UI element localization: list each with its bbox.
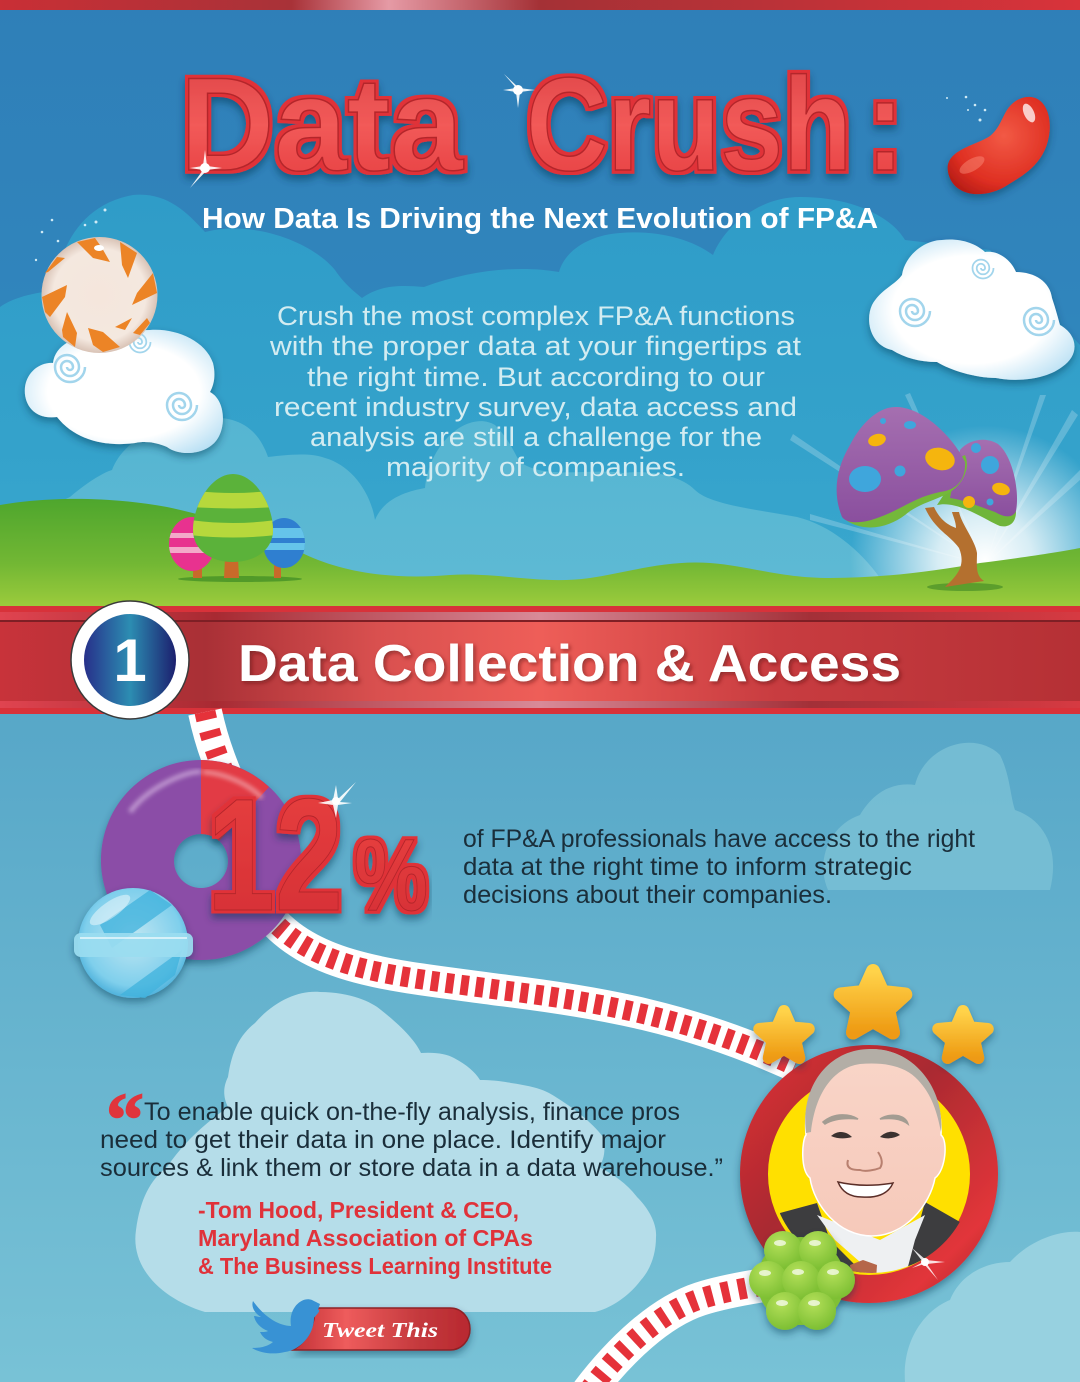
quote attribution: -Tom Hood, President & CEO, bbox=[198, 1197, 519, 1223]
candy stripe road: lower bbox=[588, 1280, 800, 1382]
icon: twitter bird bbox=[252, 1299, 320, 1353]
section heading: Data Collection & Access bbox=[238, 635, 901, 693]
icon: gold stars bbox=[759, 971, 988, 1058]
background clouds: lower section bbox=[135, 743, 1080, 1382]
background: sky bbox=[0, 0, 1080, 610]
quote attribution: & The Business Learning Institute bbox=[198, 1253, 552, 1279]
sparkle on 12 bbox=[318, 782, 356, 818]
left white cloud bbox=[25, 330, 223, 453]
stat description bbox=[463, 825, 975, 909]
intro paragraph bbox=[269, 301, 802, 482]
quote text: To enable quick on-the-fly analysis, finance pros bbox=[144, 1098, 680, 1126]
portrait: suit and shirt bbox=[780, 1202, 960, 1273]
subtitle: How Data Is Driving the Next Evolution of FP&A bbox=[202, 203, 878, 235]
top ribbon bbox=[0, 0, 1080, 10]
quote text: need to get their data in one place. Identify major bbox=[100, 1126, 666, 1154]
stat description: of FP&A professionals have access to the right bbox=[463, 825, 975, 853]
icon: red jelly bean bbox=[948, 97, 1050, 194]
portrait medallion bbox=[754, 1049, 990, 1290]
sun glow and rays bbox=[790, 393, 1080, 695]
sparkle dots near bean bbox=[946, 96, 986, 122]
icon: green gummy candy bbox=[749, 1231, 855, 1330]
icon: mushroom tree bbox=[837, 407, 1017, 591]
intro paragraph: Crush the most complex FP&A functions bbox=[277, 301, 795, 331]
quote attribution bbox=[198, 1197, 552, 1279]
medallion ring bbox=[754, 1059, 984, 1289]
quote text: sources & link them or store data in a data warehouse.” bbox=[100, 1154, 723, 1182]
icon: blue lollipop bbox=[74, 888, 193, 998]
medallion sparkle bbox=[912, 1248, 945, 1280]
intro paragraph: the right time. But according to our bbox=[307, 362, 765, 392]
portrait: hair bbox=[805, 1049, 941, 1133]
percent sign: % bbox=[354, 818, 428, 932]
intro paragraph: with the proper data at your fingertips at bbox=[269, 331, 802, 361]
quote mark: “ bbox=[106, 1078, 144, 1162]
stat description: decisions about their companies. bbox=[463, 881, 832, 909]
quote attribution: Maryland Association of CPAs bbox=[198, 1225, 533, 1251]
title bbox=[180, 51, 904, 199]
tweet button: Tweet This bbox=[322, 1318, 438, 1342]
section banner bbox=[0, 606, 1080, 714]
sparkle dots near peppermint bbox=[35, 208, 106, 261]
chart: donut 12 percent bbox=[101, 760, 301, 960]
portrait: facial features bbox=[823, 1115, 908, 1197]
big number 12: 12 bbox=[207, 765, 343, 944]
icon: peppermint candy bbox=[42, 237, 158, 353]
stat description: data at the right time to inform strategic bbox=[463, 853, 912, 881]
title: Crush bbox=[526, 51, 852, 199]
title: Data bbox=[180, 51, 464, 199]
section number badge: 1 bbox=[113, 627, 147, 694]
mid cloud layer bbox=[0, 418, 880, 610]
hills bbox=[0, 499, 1080, 606]
intro paragraph: analysis are still a challenge for the bbox=[310, 422, 762, 452]
candy stripe road: upper bbox=[205, 712, 795, 1066]
background: lower section bbox=[0, 710, 1080, 1382]
intro paragraph: majority of companies. bbox=[386, 452, 685, 482]
back cloud layer bbox=[0, 195, 1080, 610]
right white cloud bbox=[869, 240, 1075, 380]
icon: candy egg trees bbox=[165, 474, 306, 582]
quote text bbox=[100, 1098, 723, 1182]
intro paragraph: recent industry survey, data access and bbox=[274, 392, 797, 422]
title sparkles bbox=[190, 74, 535, 188]
title: : bbox=[866, 51, 904, 199]
tweet button bbox=[293, 1308, 470, 1350]
portrait: head bbox=[803, 1050, 945, 1236]
section number badge bbox=[71, 601, 189, 719]
